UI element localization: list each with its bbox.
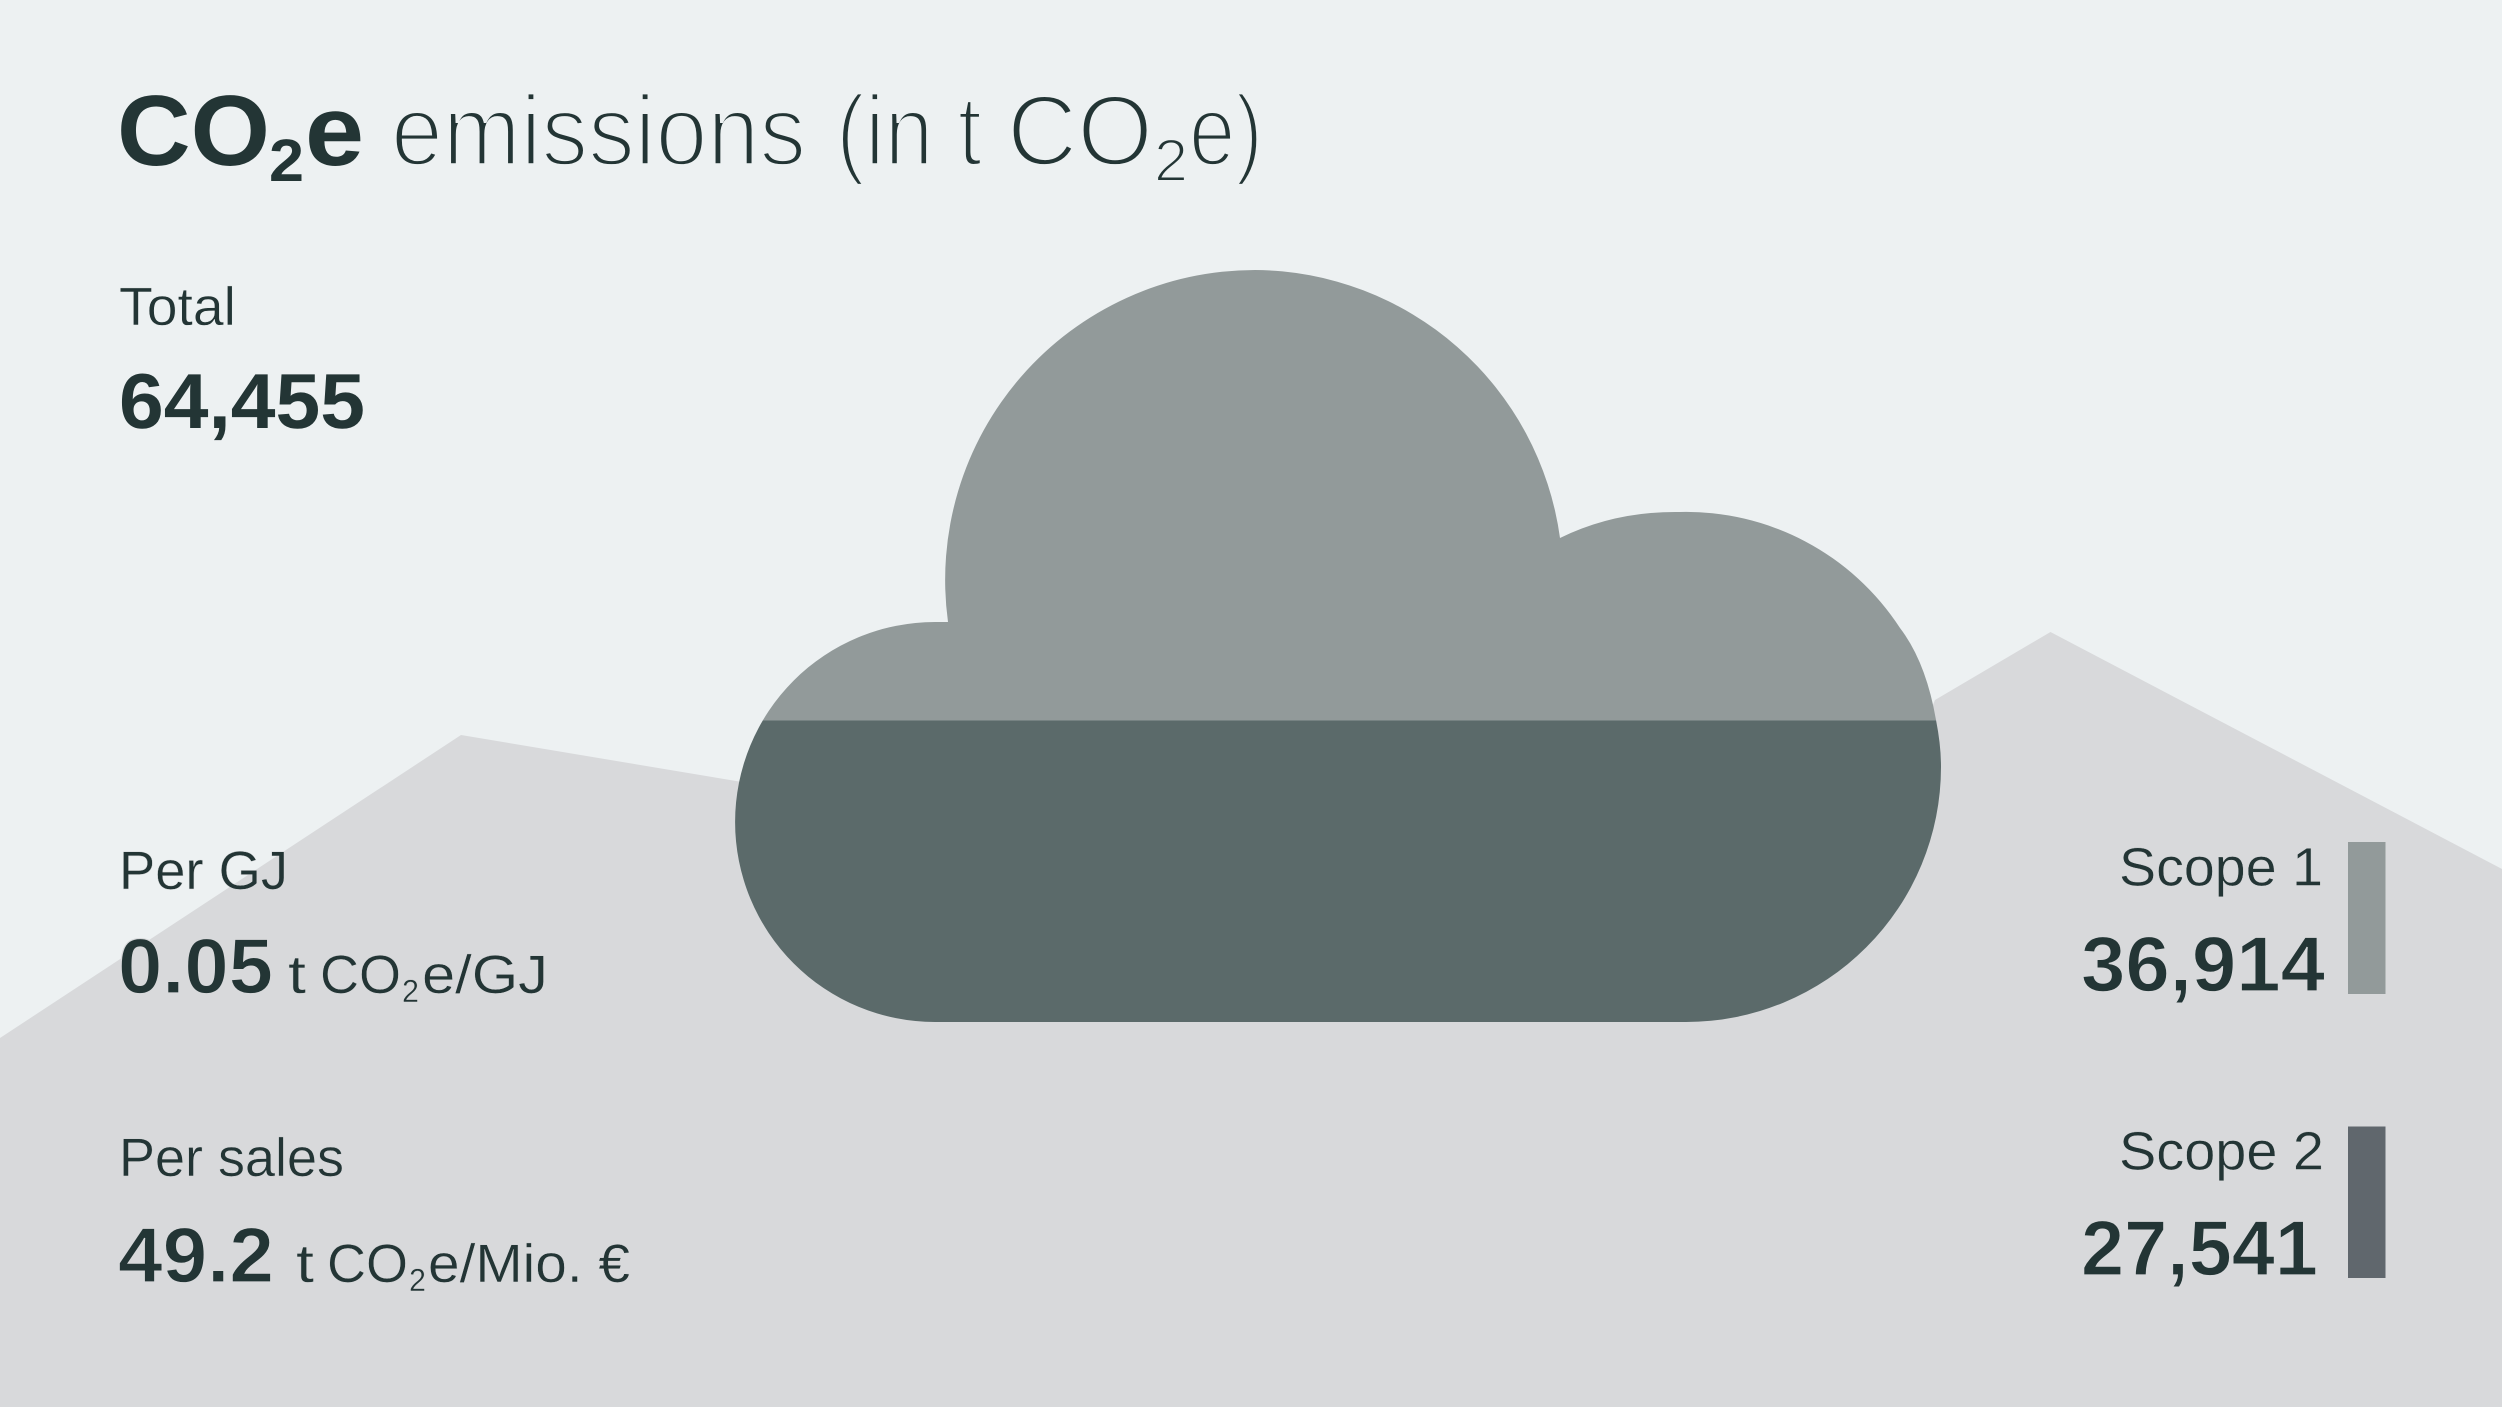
per sales: label and value: e/Mio. € [428, 1234, 630, 1294]
mountains silhouette [0, 632, 2502, 1407]
title: CO [1007, 75, 1153, 187]
per sales: label and value: 49.2 [118, 1211, 274, 1299]
per GJ: label and value: e/GJ [422, 945, 548, 1005]
scope 2: label, value and key [2081, 1122, 2386, 1292]
key: scope 2 [2348, 1126, 2386, 1278]
cloud upper part: scope 1 [762, 270, 1936, 720]
scope 1: label, value and key: Scope 1 [2119, 838, 2323, 898]
per sales: label and value: t [296, 1234, 314, 1294]
per GJ: label and value: 2 [402, 973, 419, 1009]
per GJ: label and value: t [288, 945, 306, 1005]
title: 2 [269, 127, 304, 194]
title [117, 75, 1263, 194]
scope 2: label, value and key: 27,541 [2081, 1204, 2318, 1292]
per sales: label and value: CO [327, 1234, 408, 1294]
cloud lower part: scope 2 [735, 720, 1941, 1022]
scope 1: label, value and key [2081, 838, 2386, 1008]
title: e [305, 75, 364, 187]
per GJ: label and value: CO [320, 945, 401, 1005]
cloud chart: scope 1 and scope 2 shares [735, 270, 1941, 1022]
title: CO [117, 75, 270, 187]
total: label and value: 64,455 [119, 357, 365, 445]
title: (in t [836, 75, 982, 187]
title: 2 [1154, 127, 1188, 194]
per sales: label and value [118, 1128, 630, 1299]
total: label and value [119, 277, 365, 445]
per sales: label and value: 2 [409, 1262, 426, 1298]
per GJ: label and value [118, 841, 548, 1010]
title: emissions [391, 75, 806, 187]
per sales: label and value: Per sales [119, 1128, 344, 1188]
key: scope 1 [2348, 842, 2386, 994]
per GJ: label and value: Per GJ [119, 841, 288, 901]
scope 2: label, value and key: Scope 2 [2119, 1122, 2324, 1182]
title: e) [1189, 75, 1263, 187]
scope 1: label, value and key: 36,914 [2081, 920, 2325, 1008]
total: label and value: Total [119, 277, 236, 337]
per GJ: label and value: 0.05 [118, 922, 273, 1010]
